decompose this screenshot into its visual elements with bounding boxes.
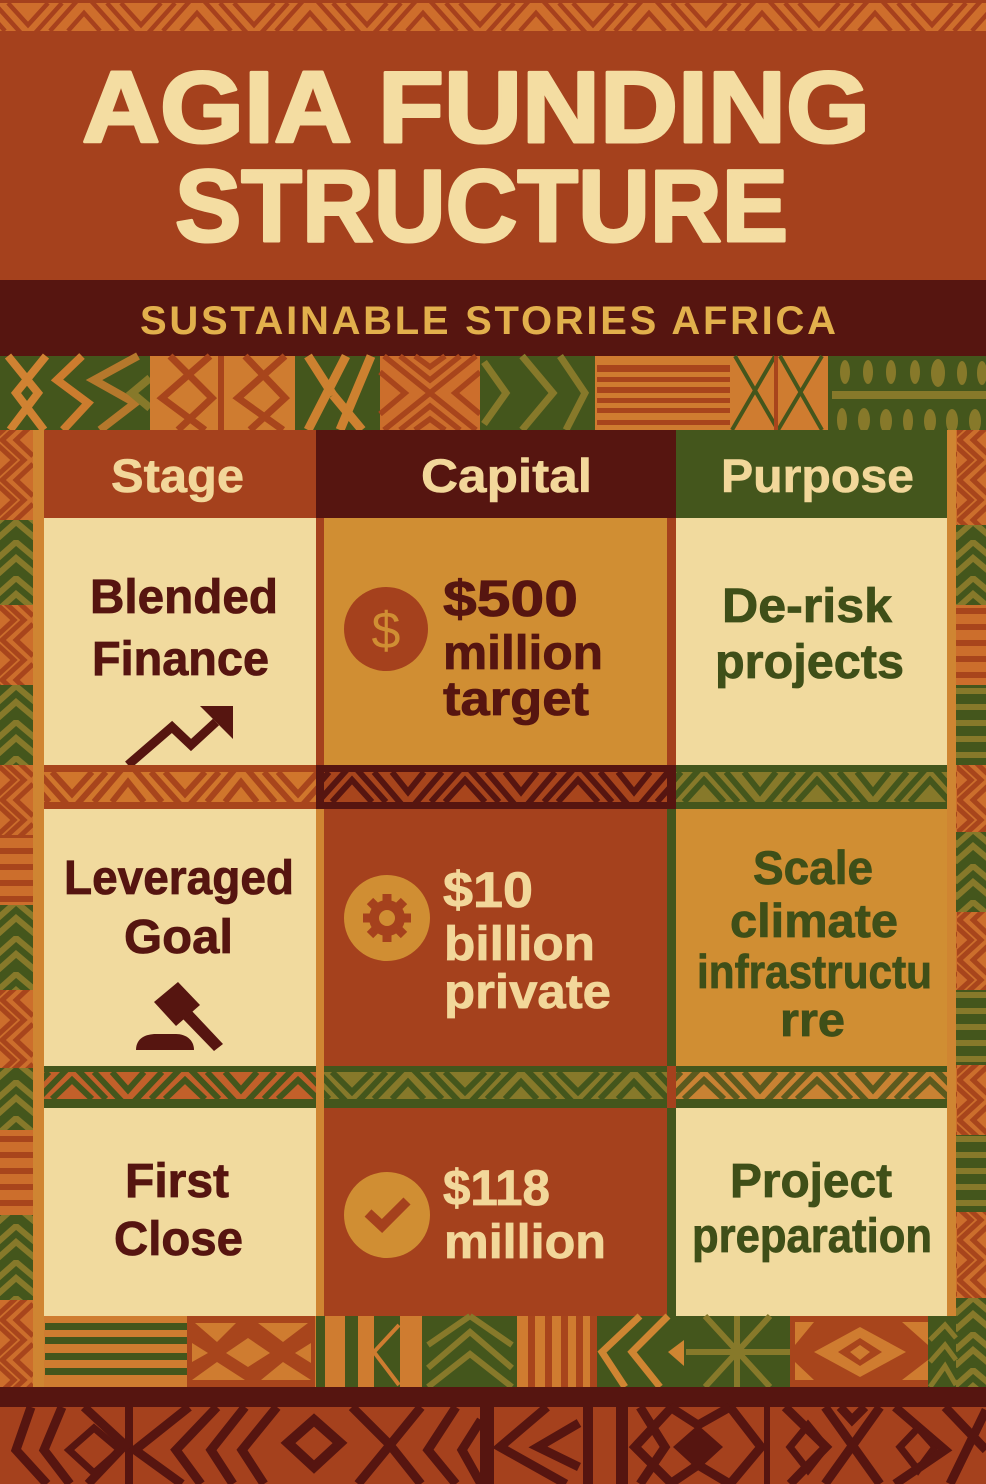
title bbox=[82, 52, 870, 263]
cell: $10 billion private: $10 bbox=[443, 862, 533, 918]
table header: Capital: Capital bbox=[421, 449, 592, 502]
subtitle band bbox=[0, 280, 986, 356]
upper pattern row bbox=[0, 356, 986, 433]
left side pattern column bbox=[0, 430, 33, 1387]
icon: rising arrow bbox=[128, 706, 233, 765]
cell: $10 billion private bbox=[316, 809, 676, 1066]
cell: Scale climate infrastructure: Scale bbox=[753, 841, 873, 894]
pattern strip row 2 bbox=[44, 1066, 947, 1108]
icon: gavel bbox=[136, 982, 223, 1051]
cell: Project preparation: preparation bbox=[692, 1210, 932, 1263]
table header: Purpose: Purpose bbox=[721, 449, 914, 502]
cell: Leveraged Goal bbox=[44, 809, 316, 1066]
cell: Scale climate infrastructure: infrastructu bbox=[697, 945, 932, 998]
icon: dollar coin: $ bbox=[372, 602, 401, 660]
bottom pattern border bbox=[0, 1407, 986, 1484]
cell: $118 million: million bbox=[444, 1216, 606, 1269]
cell: First Close: First bbox=[125, 1155, 229, 1208]
cell: $10 billion private: private bbox=[444, 966, 611, 1019]
cell: $500 million target: target bbox=[443, 673, 589, 726]
cell: $500 million target: million bbox=[443, 627, 603, 680]
subtitle band: SUSTAINABLE STORIES AFRICA bbox=[140, 299, 836, 343]
cell: $118 million: $118 bbox=[443, 1160, 550, 1216]
cell: Leveraged Goal: Leveraged bbox=[64, 852, 294, 905]
header background bbox=[0, 0, 986, 280]
table header: Capital bbox=[316, 430, 676, 518]
title: AGIA FUNDING bbox=[82, 52, 870, 164]
pattern strip row 1 bbox=[44, 765, 947, 809]
cell: $500 million target bbox=[316, 518, 676, 765]
cell: De-risk projects: De-risk bbox=[722, 580, 892, 633]
table header: Stage: Stage bbox=[111, 449, 244, 502]
title: STRUCTURE bbox=[175, 149, 788, 263]
cell: De-risk projects: projects bbox=[715, 636, 904, 689]
right side pattern column bbox=[956, 430, 986, 1387]
table frame bars bbox=[33, 430, 956, 1387]
cell: $118 million bbox=[316, 1108, 676, 1316]
cell: First Close: Close bbox=[114, 1213, 243, 1266]
cell: De-risk projects bbox=[676, 518, 947, 765]
cell: Leveraged Goal: Goal bbox=[124, 911, 233, 964]
cell: Blended Finance: Blended bbox=[90, 571, 278, 624]
cell: Scale climate infrastructure: rre bbox=[780, 993, 845, 1046]
cell: Project preparation bbox=[676, 1108, 947, 1316]
icon: gear bbox=[344, 875, 430, 961]
cell: Project preparation: Project bbox=[730, 1155, 892, 1208]
cell: Scale climate infrastructure bbox=[676, 809, 947, 1066]
cell: Blended Finance bbox=[44, 518, 316, 765]
top pattern border bbox=[0, 3, 986, 31]
cell: Scale climate infrastructure: climate bbox=[730, 894, 898, 947]
icon: check mark bbox=[344, 1172, 430, 1258]
table header: Purpose bbox=[676, 430, 947, 518]
bottom dark band bbox=[0, 1387, 986, 1407]
table header: Stage bbox=[44, 430, 316, 518]
cell: First Close bbox=[44, 1108, 316, 1316]
cell: $500 million target: $500 bbox=[443, 570, 578, 627]
icon: dollar coin bbox=[344, 587, 428, 671]
cell: Blended Finance: Finance bbox=[92, 633, 269, 686]
lower pattern row bbox=[44, 1316, 956, 1387]
cell: $10 billion private: billion bbox=[444, 918, 595, 971]
